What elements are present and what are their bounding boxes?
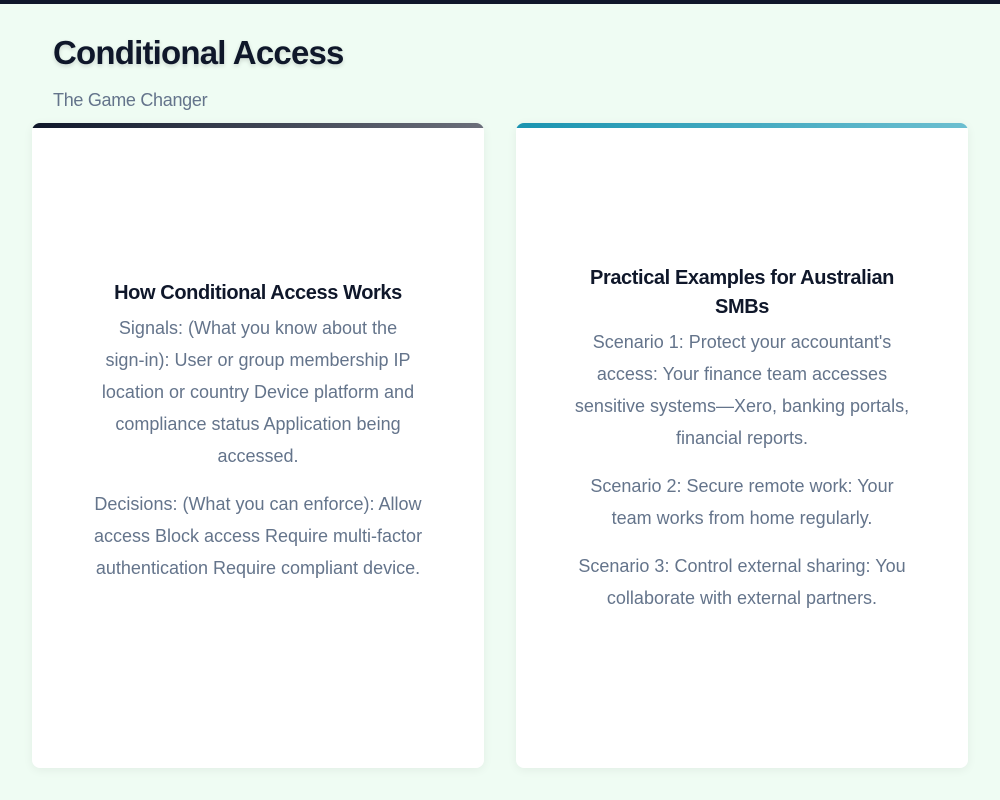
panel: practical examples bbox=[516, 123, 968, 768]
text: signals: Signals: (What you know about the sign-in): User or group membership IP location or country Device platform and compliance status Application being accessed. bbox=[102, 318, 414, 466]
text: scenario 1: Scenario 1: Protect your accountant's access: Your finance team accesses sensitive systems—Xero, banking portals, financial reports. bbox=[575, 332, 909, 448]
heading: practical examples: Practical Examples for Australian SMBs bbox=[590, 266, 894, 318]
text: decisions: Decisions: (What you can enforce): Allow access Block access Require multi-factor authentication Require compliant device. bbox=[94, 494, 422, 578]
subtitle: The Game Changer bbox=[53, 90, 207, 110]
text: scenario 3: Scenario 3: Control external sharing: You collaborate with external partners. bbox=[578, 556, 906, 608]
panel: how conditional access works bbox=[32, 123, 484, 768]
title: Conditional Access bbox=[53, 34, 344, 71]
heading: how it works: How Conditional Access Works bbox=[114, 282, 402, 304]
text: scenario 2: Scenario 2: Secure remote work: Your team works from home regularly. bbox=[590, 476, 894, 528]
